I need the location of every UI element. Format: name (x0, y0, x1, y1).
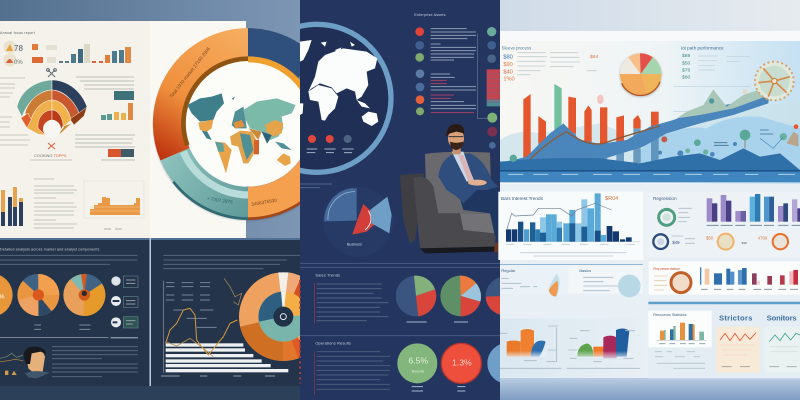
colour key bar (108, 149, 134, 157)
icon: lower scissors (48, 143, 55, 149)
section heading: left: Detailed analysis across market and analyst components (0, 248, 100, 252)
ring: green (659, 209, 675, 225)
donut with world map: 3496376530 (251, 197, 278, 207)
text lines: intro (0, 255, 303, 269)
map status dots (307, 135, 354, 153)
stacked bar chart (1, 187, 23, 226)
striped red bar chart (487, 69, 500, 106)
pie: green orange blue red (440, 276, 481, 316)
donut: rust (671, 273, 691, 293)
heading: table right: Basics (579, 268, 591, 273)
panel: small text tables (500, 264, 643, 297)
blue bars (523, 127, 659, 163)
green ridge (677, 87, 770, 118)
mini chart and portrait (0, 347, 50, 378)
sector chart (324, 188, 392, 235)
trend line (507, 203, 612, 230)
stats column left (503, 55, 515, 83)
white world map (300, 40, 378, 126)
text lines: under card (655, 352, 705, 368)
text lines: sales (314, 283, 316, 323)
sky hills (640, 116, 800, 170)
stats column right: $76 (682, 67, 691, 73)
icon column: left (415, 27, 424, 115)
bottom dark blue area (500, 148, 800, 182)
person on armchair (400, 124, 500, 253)
icon: top scissors (47, 69, 56, 77)
pie labels (34, 325, 90, 329)
ring labels: Total 1970 market 27160 2006 (169, 46, 211, 99)
blue ribbon area (500, 90, 770, 167)
metric circle: blue (487, 343, 529, 384)
cup chart: orange and blue (507, 329, 547, 358)
donut with world map (153, 31, 343, 221)
pie labels (407, 320, 468, 323)
text lines: operations (314, 352, 316, 395)
stat: zero percent (4, 54, 23, 66)
stats column right: $80 (682, 75, 691, 81)
metric circle: red: 1.3% (452, 357, 472, 367)
red bars (523, 94, 659, 160)
stat: seventy eight (4, 40, 23, 54)
metric circle: green: Secure (412, 369, 425, 374)
heading: operations: Operations Results (315, 341, 351, 346)
gold line series (166, 308, 237, 355)
text: navy ring stats: $49 (672, 240, 680, 245)
stats column right: $50 (682, 60, 691, 66)
icon list (111, 276, 138, 328)
donut with world map: + 7207 2876 (207, 196, 233, 205)
text lines: regional (672, 208, 695, 243)
bar chart: top (59, 44, 131, 63)
panel: landscape chart (500, 46, 800, 182)
bar chart: card (657, 323, 707, 344)
metric labels (412, 387, 465, 391)
text lines: burgundy (654, 276, 667, 290)
stat: blue bars: $R04 (605, 196, 619, 202)
axis labels (508, 173, 795, 176)
text lines: top left (517, 53, 597, 75)
panel divider: navy dashboard (150, 238, 151, 386)
small bar chart (101, 103, 133, 120)
icon column: right (487, 27, 497, 149)
text lines: top right (673, 56, 750, 112)
text: top right heading: Iot path performance (681, 46, 724, 51)
panel: middle column background (300, 0, 500, 400)
chart: rows and line (161, 278, 288, 376)
panel: left column background (0, 0, 300, 400)
label: cooking topps: COOKING TOPPS (34, 153, 67, 158)
panel: navy dashboard (0, 248, 328, 378)
cup chart: green red blue (577, 328, 631, 360)
pie: cropped (0, 273, 13, 317)
panel: regional dashboard (647, 192, 800, 257)
text lines: under globe (300, 184, 332, 188)
stat: top centre: $84 (590, 54, 599, 60)
divider with caption (0, 337, 138, 339)
panel: lower middle (300, 263, 529, 395)
heading: right list: Enterprise Assets (414, 13, 446, 17)
panel: blue bar chart (498, 192, 643, 260)
panel: burgundy bars (649, 261, 800, 295)
axis and note lines (506, 244, 635, 256)
inner chart card (648, 311, 712, 347)
metric circle: green: 6.5% (408, 355, 428, 365)
stats column right (682, 53, 691, 81)
back area (500, 100, 800, 167)
green bar (554, 84, 562, 132)
shape: pale blue disc (618, 275, 641, 297)
text lines: left column (0, 78, 72, 160)
left edge marks (297, 280, 303, 383)
world map (187, 93, 296, 173)
heading: sales trends: Sales Trends (315, 273, 340, 278)
bar chart (506, 193, 640, 242)
fan chart (17, 80, 87, 138)
heading: burgundy: Representation (653, 266, 680, 271)
gear dial (755, 62, 794, 100)
area bar chart (84, 181, 144, 229)
stat: zero percent: 0% (14, 60, 23, 66)
dividers (300, 263, 500, 336)
heading: blue bars: Bars Interest Trends (501, 196, 544, 201)
text block: lower centre (34, 179, 77, 228)
bar chart: purple and blue (707, 194, 800, 225)
text lines: cup charts (500, 326, 640, 368)
figure (438, 124, 500, 253)
text: pale ring stat: $98 (742, 241, 747, 245)
stats column left: 1%0 (503, 77, 515, 83)
text lines: tables (501, 277, 623, 291)
panel: cream dashboard (0, 31, 144, 229)
stats column left: $80 (503, 55, 513, 61)
pie: right (63, 274, 105, 316)
connector line (477, 33, 488, 118)
heading: cream dashboard: Annual focus report (0, 31, 35, 35)
brown trend line (530, 126, 660, 159)
bar chart: warm to blue (700, 267, 798, 289)
heading: table left: Regular (501, 268, 516, 273)
heading: strictors: Strictors (719, 314, 752, 323)
metric circle: green (397, 343, 437, 383)
shape: orange wedge (549, 281, 558, 296)
globe ring with map (300, 14, 500, 254)
large layered donut (239, 272, 328, 361)
shape: orange teardrop (548, 273, 560, 297)
trees and markers (510, 89, 798, 162)
pie chart (620, 53, 661, 95)
heading: chart card: Resources Statistics (653, 313, 687, 317)
armchair (400, 152, 497, 253)
ring: orange pale (706, 234, 734, 250)
card: green zigzag (765, 327, 800, 373)
text lines: list (431, 29, 476, 109)
metric circle: red (441, 343, 481, 383)
teal tag (114, 91, 134, 100)
ring: navy (653, 234, 668, 249)
ring: orange (758, 234, 788, 249)
stats column left: $40 (503, 69, 513, 75)
text lines: lower paragraph (52, 347, 138, 377)
label: sector chart: Business (347, 243, 362, 247)
stats column left: $90 (503, 62, 513, 68)
pie: navy green red (396, 276, 436, 316)
horizontal bars (166, 343, 288, 372)
ring: orange: 4700 (758, 235, 768, 240)
text: top left heading: Sleeve process (502, 46, 531, 51)
text lines: right column (75, 77, 135, 160)
card: red zigzag (716, 327, 760, 373)
pie: middle (17, 274, 59, 316)
legend blocks (32, 44, 57, 63)
panel: light column background (500, 0, 800, 400)
pie: cropped right (486, 277, 524, 315)
stat: seventy eight: 78 (14, 44, 23, 53)
panel: lower chart strip (500, 302, 800, 378)
heading: regional: Regression (653, 196, 677, 201)
heading: sonitors: Sonitors (767, 314, 797, 323)
ring: orange pale: $50 (706, 235, 714, 240)
stats column right: $89 (682, 53, 691, 59)
